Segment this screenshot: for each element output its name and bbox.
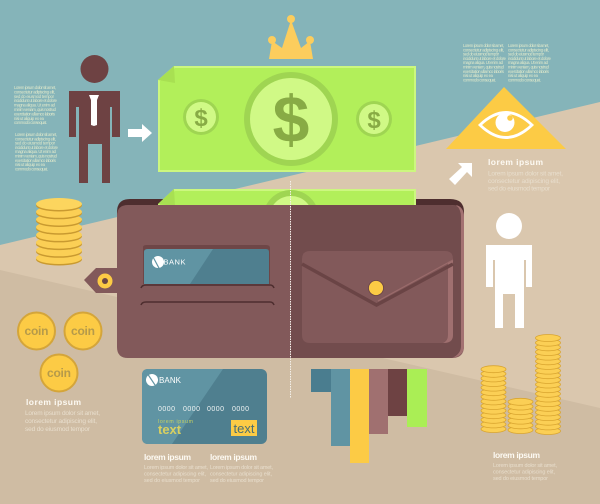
text: left notes: minim veniam, quis nostrud xyxy=(15,154,58,158)
person with tie xyxy=(69,55,120,183)
coin 3: coin xyxy=(47,366,71,380)
banknote xyxy=(158,66,416,172)
stack 1 xyxy=(481,366,506,432)
text: top right notes: consectetur adipiscing elit, xyxy=(463,47,504,52)
text: left notes: nisi ut aliquip ex ea xyxy=(15,162,46,167)
text: top right notes: Lorem ipsum dolor sit amet, xyxy=(508,43,549,48)
text: left notes: sed do eiusmod tempor xyxy=(15,141,56,146)
text: pyramid caption: sed do eiusmod tempor xyxy=(488,186,551,192)
text: left notes: exercitation ullamco laboris xyxy=(15,158,56,163)
card slot xyxy=(143,245,270,284)
text: left notes: nisi ut aliquip ex ea xyxy=(14,116,45,121)
text: top right notes: sed do eiusmod tempor xyxy=(508,52,545,57)
text: top right notes: nisi ut aliquip ex ea xyxy=(463,73,494,78)
wallet front xyxy=(117,205,464,358)
card in wallet xyxy=(144,249,269,284)
text: top right notes: incididunt ut labore et dolore xyxy=(508,56,552,61)
right dollar medallion: $ xyxy=(367,107,381,134)
bank card: lorem ipsum xyxy=(158,419,193,425)
stack 3 xyxy=(536,334,560,434)
text: top right notes: commodo consequat. xyxy=(508,77,541,82)
text: top right notes xyxy=(463,43,552,82)
tab button xyxy=(98,274,112,288)
text: stacks caption xyxy=(493,450,557,482)
text: pyramid caption: lorem ipsum xyxy=(488,157,543,167)
text: top right notes: exercitation ullamco laboris xyxy=(508,69,549,74)
text: card captions: Lorem ipsum dolor sit amet, xyxy=(144,465,208,471)
bank card: 0000 xyxy=(232,406,249,413)
wallet back xyxy=(117,199,464,240)
text: left notes: exercitation ullamco laboris xyxy=(14,111,55,116)
text: left notes: commodo consequat. xyxy=(15,166,48,171)
person white xyxy=(486,213,532,328)
text: left notes: magna aliqua. Ut enim ad xyxy=(14,103,56,108)
left dollar medallion: $ xyxy=(194,105,208,132)
text: top right notes: minim veniam, quis nostrud xyxy=(463,64,505,70)
arrow: up right xyxy=(449,163,472,185)
left dollar medallion xyxy=(183,99,219,135)
bank card: text xyxy=(158,422,182,437)
text: coins caption: Lorem ipsum dolor sit amet, xyxy=(25,410,100,417)
text: stacks caption: sed do eiusmod tempor xyxy=(493,476,548,482)
text: stacks caption: consectetur adipiscing elit, xyxy=(493,470,555,476)
wallet tab xyxy=(84,268,118,293)
text: top right notes: minim veniam, quis nostrud xyxy=(508,64,550,70)
text: card captions: consectetur adipiscing elit, xyxy=(144,472,206,478)
text: top right notes: Lorem ipsum dolor sit amet, xyxy=(463,43,504,48)
text: card captions: lorem ipsum xyxy=(210,452,257,462)
text: left notes: sed do eiusmod tempor xyxy=(14,94,55,99)
card in wallet: BANK xyxy=(164,258,186,266)
text: left notes: minim veniam, quis nostrud xyxy=(14,107,57,112)
bank card: 0000 xyxy=(183,406,200,413)
text: left notes: consectetur adipiscing elit, xyxy=(15,136,56,141)
bank card xyxy=(142,369,267,444)
central dollar medallion xyxy=(244,72,338,166)
logo xyxy=(146,373,158,388)
text: top right notes: commodo consequat. xyxy=(463,77,496,82)
wallet xyxy=(84,205,464,358)
text: coins caption xyxy=(25,397,100,433)
text: coins caption: sed do eiusmod tempor xyxy=(25,426,91,433)
text: card captions: lorem ipsum xyxy=(144,452,191,462)
coin stacks right xyxy=(481,334,560,434)
text: card captions: Lorem ipsum dolor sit amet, xyxy=(210,465,273,471)
text: card captions xyxy=(144,452,273,484)
text: coins caption: lorem ipsum xyxy=(26,397,81,407)
dashed center line xyxy=(290,181,292,398)
text: left notes: magna aliqua. Ut enim ad xyxy=(15,149,57,154)
coin 2: coin xyxy=(71,324,95,338)
text: top right notes: magna aliqua. Ut enim ad xyxy=(508,60,549,65)
bank card: BANK xyxy=(159,376,182,385)
tie xyxy=(89,95,99,126)
wallet slot lines xyxy=(141,285,274,305)
second banknote xyxy=(158,189,416,246)
text: card captions: sed do eiusmod tempor xyxy=(210,478,264,484)
text: pyramid caption: consectetur adipiscing elit, xyxy=(488,178,560,185)
right dollar medallion xyxy=(356,101,392,137)
text badge: text xyxy=(234,421,255,436)
text: stacks caption: lorem ipsum xyxy=(493,450,540,460)
text: top right notes: nisi ut aliquip ex ea xyxy=(508,73,539,78)
text: top right notes: consectetur adipiscing elit, xyxy=(508,47,549,52)
pocket xyxy=(302,251,453,343)
coins xyxy=(18,312,102,392)
right half xyxy=(291,205,462,358)
icon: crown xyxy=(268,15,314,59)
text: left notes: Lorem ipsum dolor sit amet, xyxy=(15,132,57,137)
text: left notes: incididunt ut labore et dolore xyxy=(15,145,59,150)
coin 1: coin xyxy=(24,324,48,338)
text: coins caption: consectetur adipiscing elit, xyxy=(25,418,97,425)
stack 2 xyxy=(508,398,533,434)
arrow: person to banknote xyxy=(128,124,152,142)
bank card: 0000 xyxy=(158,406,175,413)
text: left notes: consectetur adipiscing elit, xyxy=(14,89,55,94)
text: stacks caption: Lorem ipsum dolor sit amet, xyxy=(493,463,557,469)
text: top right notes: magna aliqua. Ut enim ad xyxy=(463,60,504,65)
text: top right notes: exercitation ullamco laboris xyxy=(463,69,504,74)
text: card captions: consectetur adipiscing elit, xyxy=(210,472,272,478)
text: left notes: incididunt ut labore et dolore xyxy=(14,98,58,103)
text: pyramid caption xyxy=(488,157,563,192)
text: top right notes: sed do eiusmod tempor xyxy=(463,52,500,57)
text: left notes: commodo consequat. xyxy=(14,120,47,125)
icon: pyramid with eye xyxy=(446,87,566,149)
coin stack left xyxy=(36,198,82,266)
central dollar medallion: $ xyxy=(273,82,309,156)
bar chart xyxy=(311,369,427,463)
text: left notes: Lorem ipsum dolor sit amet, xyxy=(14,85,56,90)
text: top right notes: incididunt ut labore et dolore xyxy=(463,56,507,61)
text: left notes xyxy=(14,85,59,171)
text: card captions: sed do eiusmod tempor xyxy=(144,478,200,484)
text: pyramid caption: Lorem ipsum dolor sit amet, xyxy=(488,170,563,178)
bank card: 0000 xyxy=(207,406,224,413)
